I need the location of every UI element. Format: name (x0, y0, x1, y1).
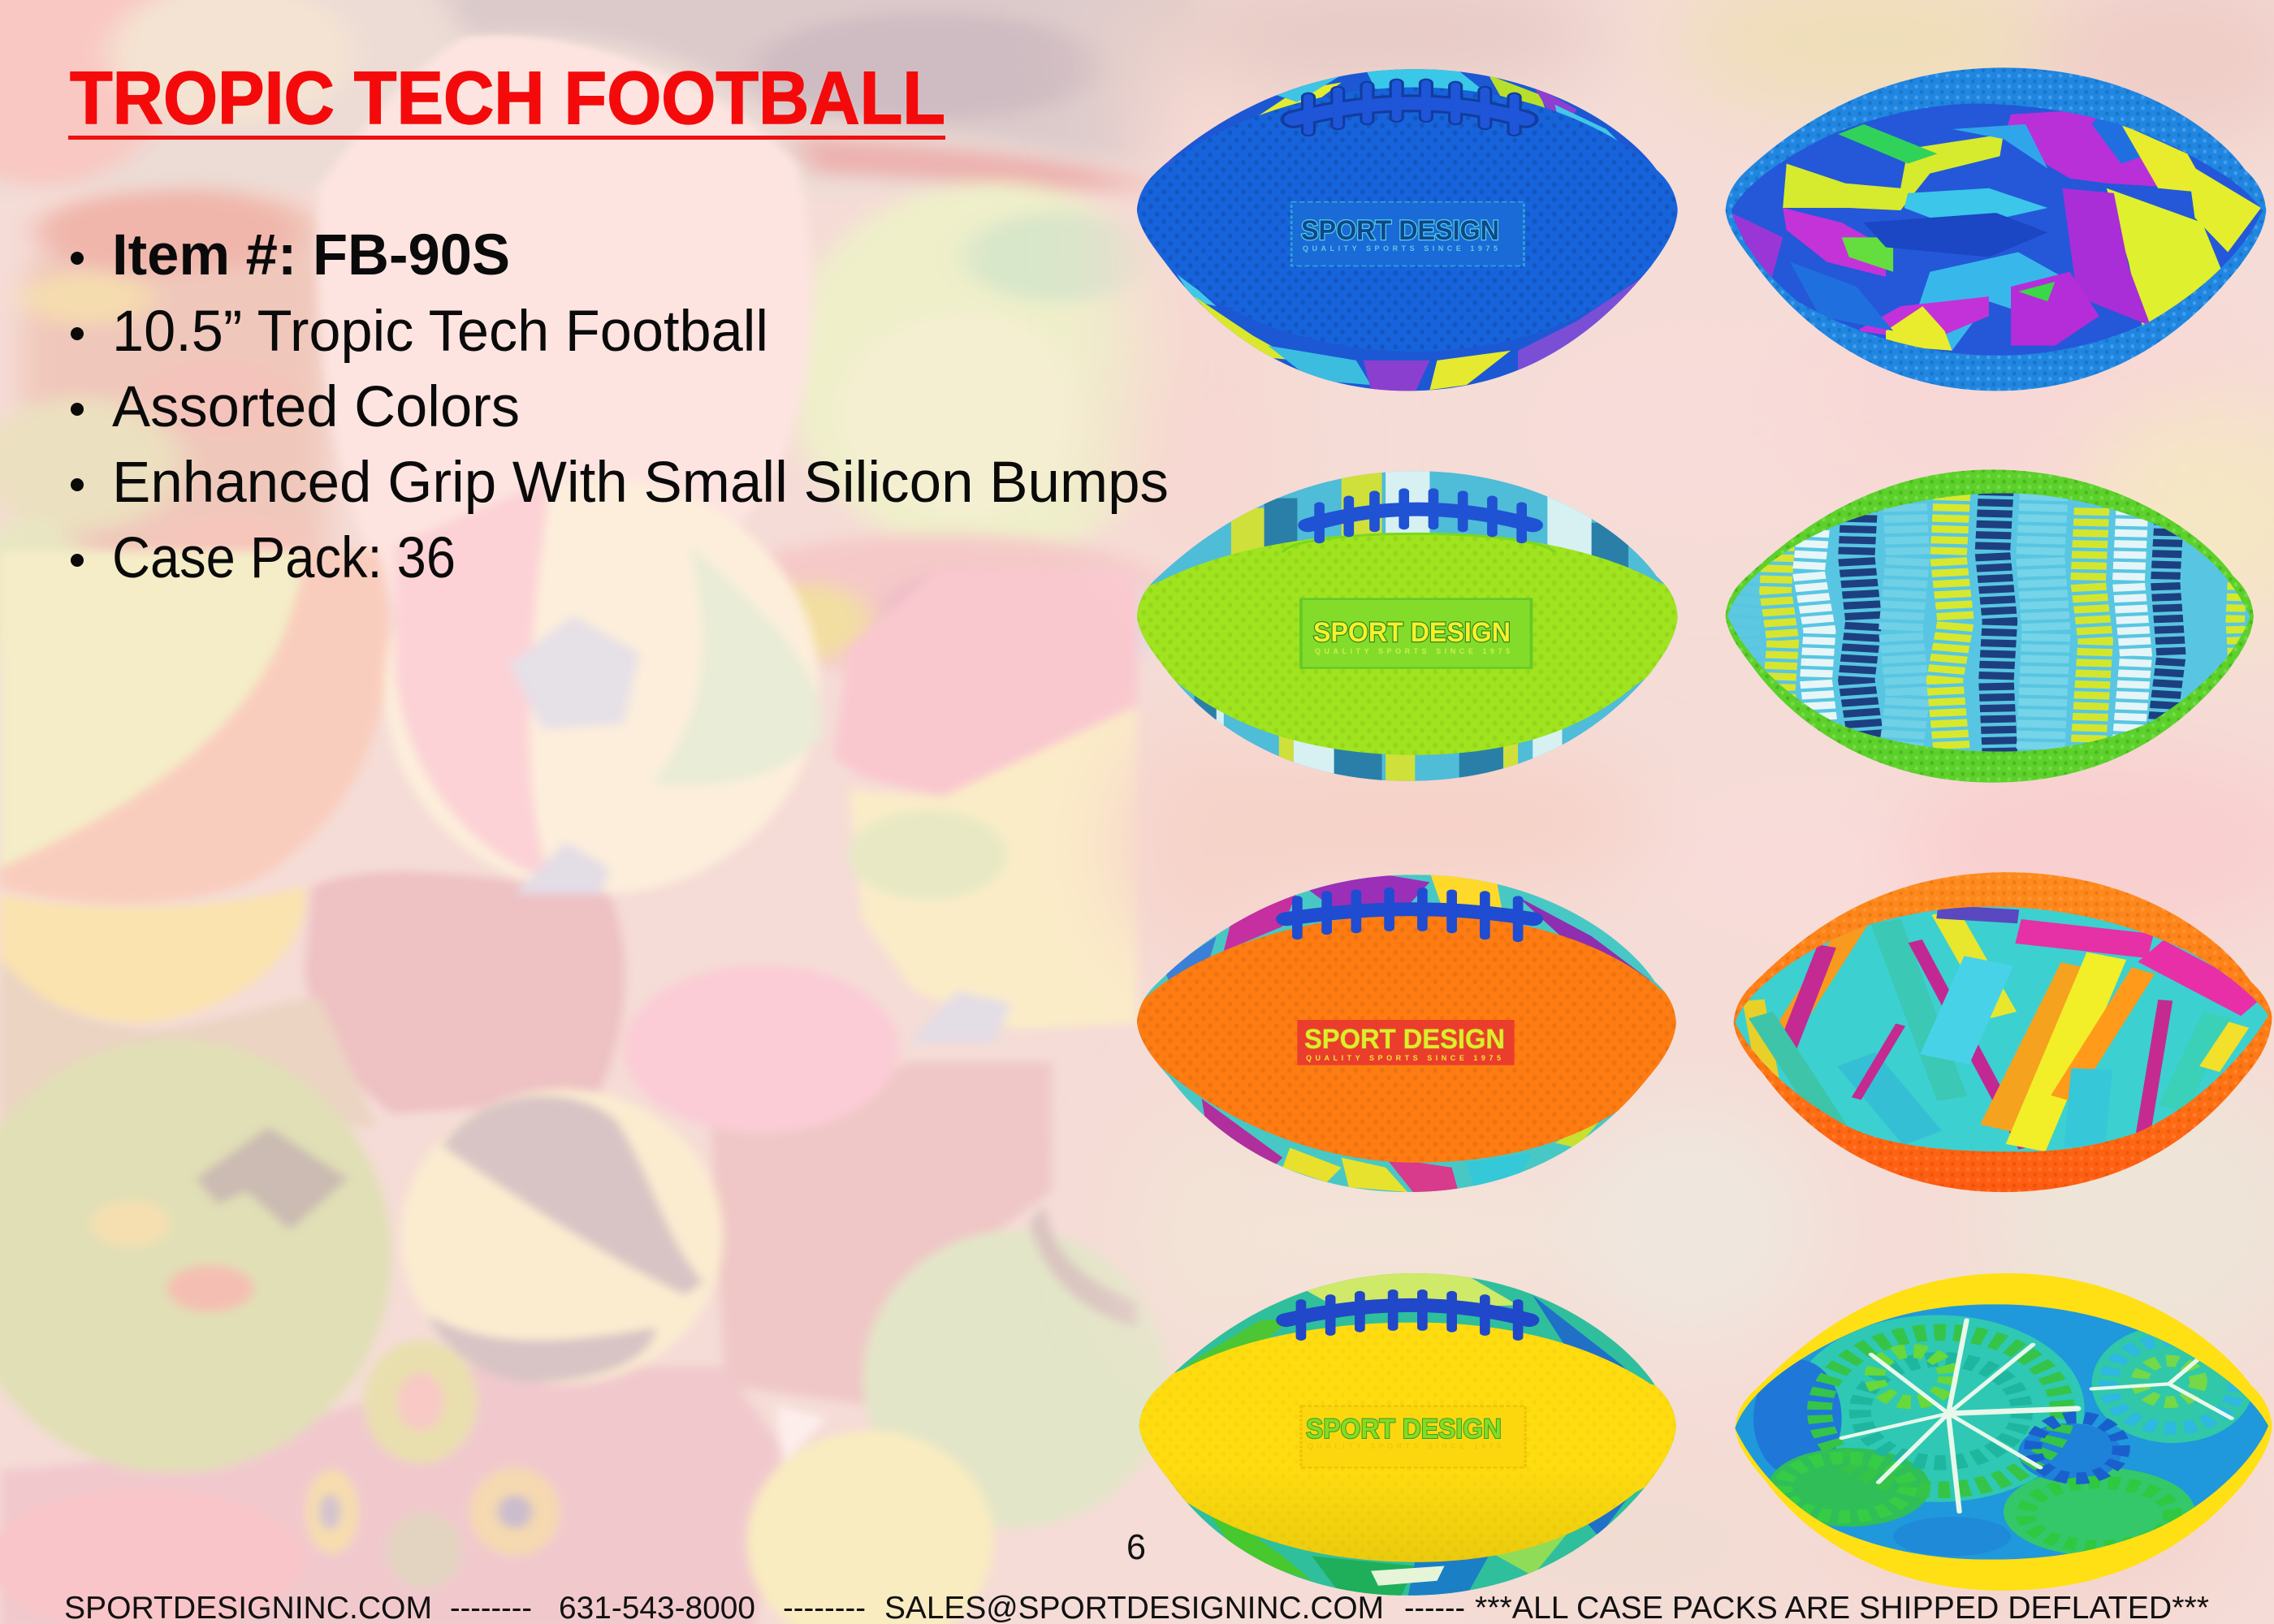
laces (1294, 84, 1525, 132)
football: orange front: SPORT DESIGN (1304, 1024, 1505, 1055)
print (1731, 104, 2263, 356)
football: lime front (1137, 471, 1678, 781)
football: yellow front: QUALITY SPORTS SINCE 1975 (1308, 1442, 1501, 1450)
football: orange back (1724, 872, 2274, 1192)
patch (1301, 599, 1531, 668)
football: blue back (1710, 67, 2274, 391)
patch (1301, 1406, 1525, 1467)
panel (1121, 533, 1702, 755)
patch (1291, 202, 1524, 266)
football: green back (1710, 469, 2268, 783)
print (1724, 902, 2274, 1158)
print (1727, 493, 2250, 752)
football: yellow front (1121, 1266, 1702, 1605)
bullet list: 10.5” Tropic Tech Football (112, 300, 768, 364)
football: lime front: QUALITY SPORTS SINCE 1975 (1315, 647, 1510, 655)
football: orange front: QUALITY SPORTS SINCE 1975 (1306, 1054, 1501, 1062)
laces (1286, 1293, 1529, 1337)
panel (1121, 88, 1702, 352)
panel (1121, 914, 1702, 1163)
laces (1308, 492, 1533, 540)
soft right-side wash (1088, 0, 2274, 1608)
football: blue front: SPORT DESIGN (1301, 215, 1499, 246)
football: orange front (1137, 875, 1676, 1192)
page number: 6 (1126, 1527, 1146, 1567)
football: blue front: QUALITY SPORTS SINCE 1975 (1303, 244, 1498, 253)
bullet list: Enhanced Grip With Small Silicon Bumps (112, 451, 1169, 515)
bullet list: Assorted Colors (112, 375, 520, 439)
football: lime front: SPORT DESIGN (1313, 617, 1511, 648)
bullet list: Item #: FB-90S (112, 223, 510, 287)
bullet list (71, 223, 1169, 590)
lower-left collage region (0, 480, 1168, 1624)
football: yellow back (1724, 1273, 2274, 1591)
patch (1297, 1020, 1515, 1065)
print (1724, 1295, 2274, 1566)
bullet list: Case Pack: 36 (112, 526, 456, 590)
football: yellow front: SPORT DESIGN (1306, 1414, 1502, 1445)
footer contact line (64, 1591, 2209, 1624)
panel (1121, 1323, 1702, 1562)
football: blue front (1137, 69, 1678, 391)
upper-left collage region (0, 0, 1204, 675)
laces (1286, 891, 1533, 939)
title: TROPIC TECH FOOTBALL (70, 57, 945, 140)
